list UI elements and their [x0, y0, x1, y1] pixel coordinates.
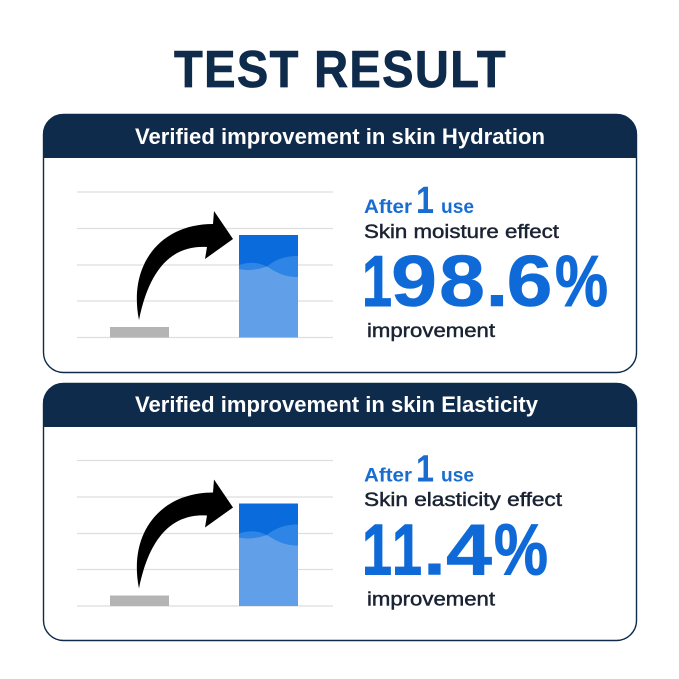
arrow [137, 480, 233, 588]
panel header bar [43, 383, 637, 427]
percentage: 1 [362, 242, 392, 322]
improvement label: improvement [367, 590, 496, 610]
panel heading: Verified improvement in skin Hydration [135, 124, 545, 149]
bar chart [77, 192, 333, 338]
percentage [362, 242, 608, 322]
result text [362, 448, 563, 610]
effect label: Skin elasticity effect [364, 490, 563, 511]
result text: 1 [416, 180, 434, 222]
arrow [137, 211, 233, 320]
after bar with wave [239, 504, 298, 606]
bar chart [77, 460, 333, 606]
panel: hydration [43, 114, 637, 372]
panel: elasticity [43, 383, 637, 640]
result text: use [441, 197, 474, 218]
percentage: 1 [362, 510, 392, 590]
title: TEST RESULT [174, 40, 507, 99]
percentage: 98.6 [391, 242, 553, 322]
after bar with wave [239, 235, 298, 338]
effect label: Skin moisture effect [364, 222, 560, 243]
percentage: % [494, 510, 548, 590]
percentage: 1 [392, 510, 422, 590]
improvement label: improvement [367, 321, 496, 342]
result text: use [441, 466, 474, 486]
before bar [110, 596, 169, 606]
after 1 use: After [364, 466, 413, 486]
panel header bar [43, 114, 637, 158]
panel frame [44, 384, 636, 640]
percentage: % [555, 242, 608, 322]
percentage: .4 [423, 510, 492, 590]
percentage [362, 510, 548, 590]
panel heading: Verified improvement in skin Elasticity [135, 392, 539, 417]
before bar [110, 327, 169, 338]
after 1 use: After [364, 197, 413, 218]
result text [362, 180, 608, 342]
panel frame [44, 114, 636, 372]
result text: 1 [416, 448, 434, 490]
